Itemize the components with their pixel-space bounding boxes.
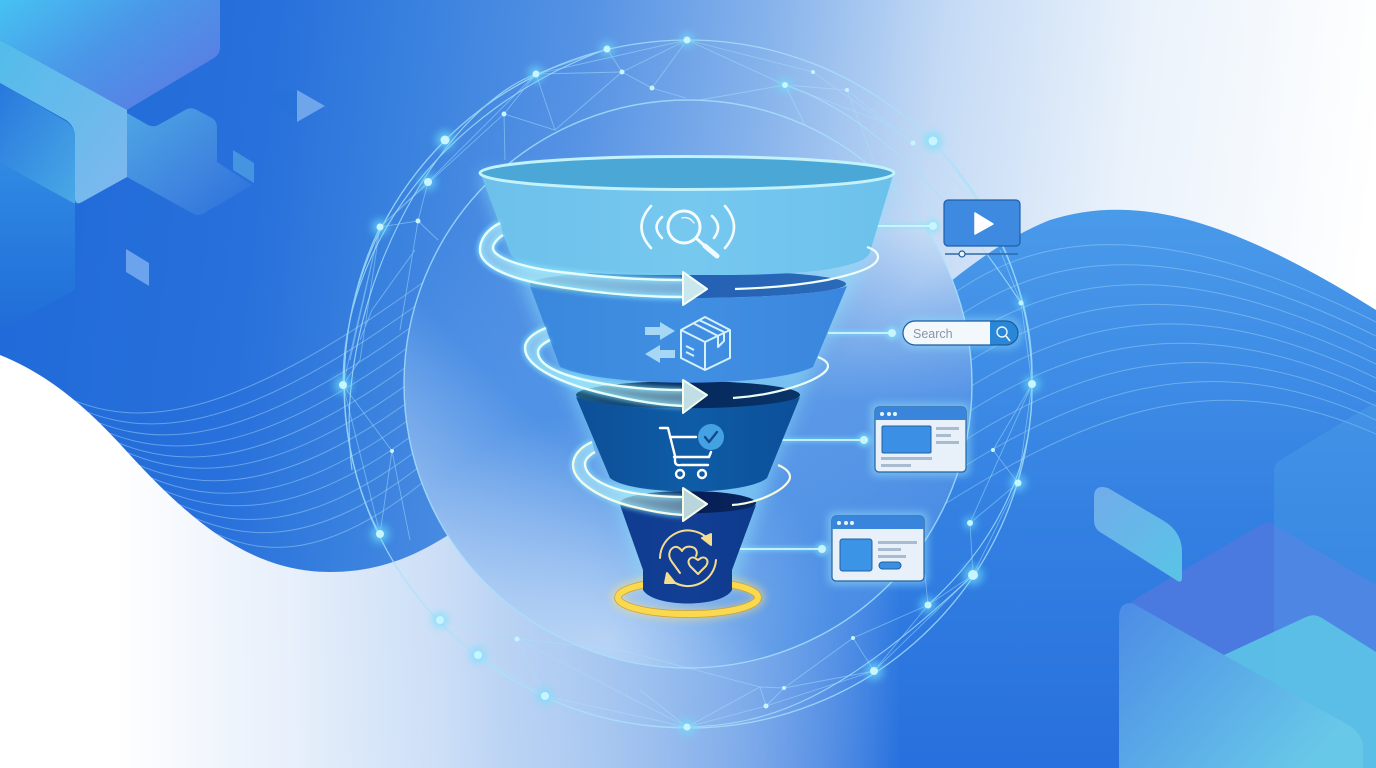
search bar card	[899, 317, 1023, 349]
network sphere	[334, 33, 1040, 735]
web page card 2	[828, 512, 928, 585]
network nodes	[334, 33, 1040, 735]
connector lines	[738, 221, 938, 554]
swirl ring 3 with arrow	[573, 442, 790, 521]
swirl ring 2 with arrow	[525, 328, 828, 413]
web page card 1	[871, 403, 970, 476]
icon: shopping cart with check	[660, 424, 724, 478]
network links	[343, 40, 1032, 727]
icon: hearts with loop arrows	[660, 530, 716, 586]
gold ring: base of funnel	[616, 579, 760, 615]
swirl ring 1 with arrow	[480, 223, 878, 305]
background: left wave contour lines	[74, 282, 422, 548]
funnel glow	[478, 172, 896, 590]
background: top-left isometric blocks	[0, 0, 325, 330]
background: bottom-right isometric blocks	[1094, 402, 1376, 768]
background: bottom-left white wave	[0, 355, 1000, 768]
search bar card: Search	[913, 327, 953, 341]
inner sphere disk	[404, 244, 972, 666]
video player card	[944, 200, 1020, 257]
icon: magnifier with signal waves	[642, 206, 734, 256]
funnel stage 1: awareness	[480, 156, 894, 275]
funnel stage 4: retention	[620, 491, 756, 604]
funnel stage 2: consideration	[530, 270, 847, 383]
background: right wave contour lines	[946, 244, 1376, 504]
background: right blue wave	[618, 210, 1376, 768]
icon: compare arrows and box	[645, 317, 730, 370]
sphere rings	[343, 40, 1032, 728]
funnel stage 3: purchase	[576, 381, 800, 492]
